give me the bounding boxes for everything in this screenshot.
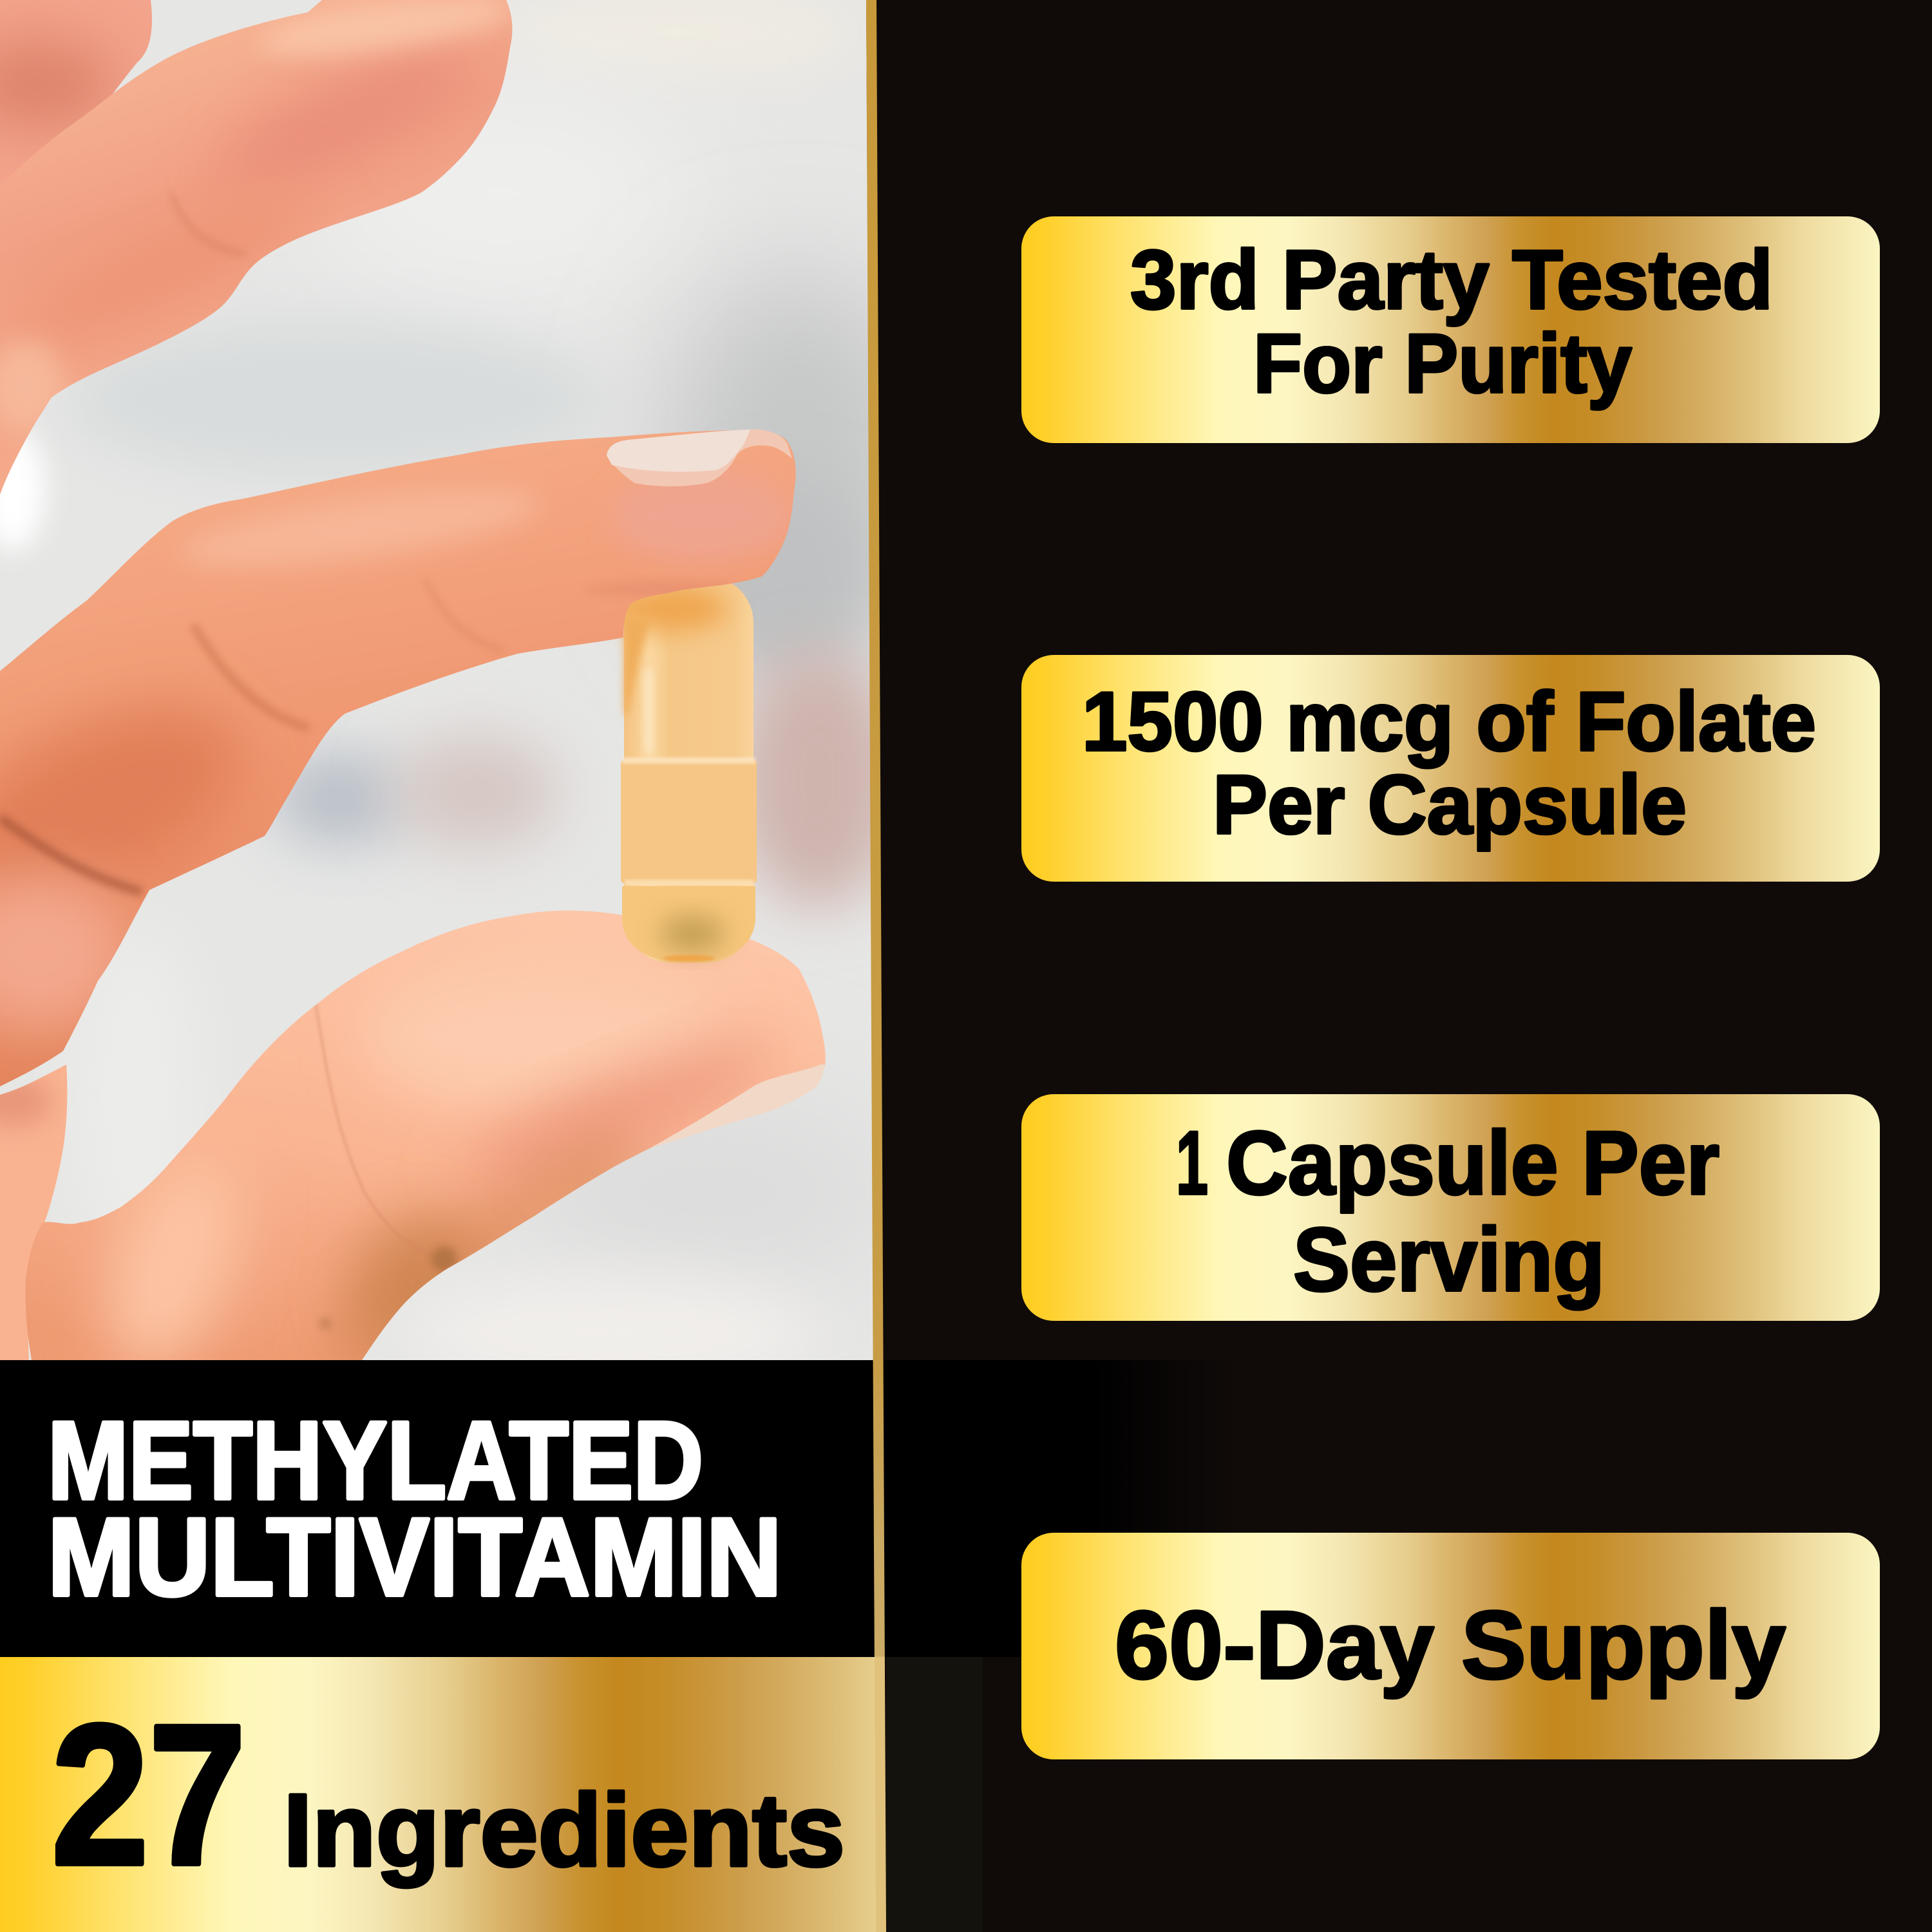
pill: 3rd party tested (1021, 216, 1880, 443)
pill: 3rd party tested: For Purity (1253, 316, 1632, 410)
pill: 1500 mcg folate (1021, 655, 1880, 882)
pill: 1 capsule per serving (1021, 1094, 1880, 1321)
pill: 3rd party tested: 3rd Party Tested (1130, 232, 1773, 327)
photo: hand holding capsule (0, 0, 934, 1391)
black title band (0, 1360, 1236, 1657)
pill: 1500 mcg folate: Per Capsule (1213, 757, 1687, 851)
pill: 60-day supply (1021, 1533, 1880, 1759)
photo background (0, 0, 934, 1391)
gold ingredients band (0, 1657, 877, 1932)
pill: 1 capsule per serving: Serving (1293, 1209, 1605, 1310)
stat: 27 ingredients: 27 (52, 1683, 246, 1906)
thumb (0, 902, 837, 1385)
finger: middle, above capsule (0, 425, 805, 1095)
white blur highlight at left (0, 428, 45, 551)
stat: 27 ingredients (52, 1683, 845, 1906)
title: methylated multivitamin: METHYLATED (48, 1399, 703, 1522)
title: methylated multivitamin: MULTIVITAMIN (48, 1495, 782, 1619)
title: methylated multivitamin (48, 1399, 782, 1619)
thumbnail (650, 1064, 825, 1148)
pill: 1500 mcg folate: 1500 mcg of Folate (1082, 674, 1816, 768)
finger: upper index (0, 0, 528, 515)
pill: 60-day supply: 60-Day Supply (1115, 1591, 1786, 1699)
capsule (612, 576, 757, 963)
pill: 1 capsule per serving: 1 (1176, 1112, 1208, 1213)
pill: 1 capsule per serving: Capsule Per (1226, 1112, 1719, 1213)
gold vertical stripe (866, 0, 886, 1932)
finger: lower left (0, 1056, 77, 1365)
fingernail: middle finger (607, 430, 792, 486)
finger: far left (0, 0, 152, 185)
stat: 27 ingredients: Ingredients (283, 1772, 845, 1888)
